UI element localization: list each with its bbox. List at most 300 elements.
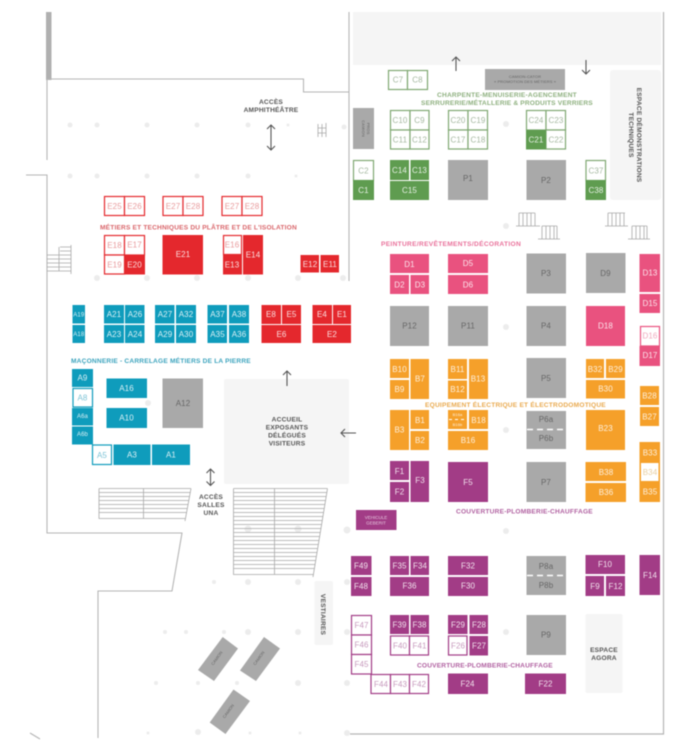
stand B29 bbox=[606, 359, 625, 378]
stand D5 bbox=[448, 254, 488, 273]
stand P11: P11 bbox=[461, 322, 475, 330]
label: accès amphithéâtre: AMPHITHÉÂTRE bbox=[244, 105, 299, 114]
stand F42: F42 bbox=[412, 680, 426, 689]
panel: accueil: DÉLÉGUÉS bbox=[268, 430, 306, 440]
panel: rotated stand 1 bbox=[198, 637, 238, 681]
stand A18: A18 bbox=[73, 332, 85, 338]
heading: couverture 2: COUVERTURE-PLOMBERIE-CHAUFFAGE bbox=[417, 662, 553, 670]
stand B38 bbox=[586, 462, 626, 481]
stand P9 bbox=[526, 615, 566, 655]
stand E20: E20 bbox=[127, 260, 142, 270]
stand D17: D17 bbox=[643, 351, 658, 360]
zone: couverture stands lower bbox=[352, 614, 622, 694]
stand D3 bbox=[410, 275, 429, 294]
stand A6b: A6b bbox=[77, 432, 89, 438]
stand P1: P1 bbox=[463, 174, 473, 183]
arrow: accueil left bbox=[341, 429, 356, 437]
stand A6a: A6a bbox=[77, 414, 89, 420]
stand F36: F36 bbox=[402, 582, 417, 590]
stand F32: F32 bbox=[461, 562, 475, 570]
stands B33 B34 B35: B34 bbox=[643, 468, 658, 477]
stand B11 bbox=[448, 359, 467, 379]
panel: accueil: VISITEURS bbox=[269, 440, 306, 448]
heading: peinture: PEINTURE/REVÊTEMENTS/DÉCORATION bbox=[381, 239, 521, 248]
stand E8 bbox=[262, 305, 281, 324]
stand F42 bbox=[410, 674, 428, 694]
zone: couverture stands middle bbox=[351, 555, 660, 596]
stand D16 bbox=[640, 326, 660, 346]
zone: équipement électrique stands lower bbox=[390, 410, 660, 502]
stand C1 bbox=[353, 180, 374, 200]
stand A35: A35 bbox=[210, 330, 225, 339]
stand F24: F24 bbox=[460, 680, 475, 688]
stand F10 bbox=[586, 555, 625, 574]
stand D13: D13 bbox=[643, 268, 658, 278]
stand B1: B1 bbox=[415, 416, 425, 425]
stand B30: B30 bbox=[598, 384, 613, 394]
stand B16a B16b bbox=[448, 410, 467, 429]
stand C2 bbox=[354, 160, 374, 180]
stand P2 bbox=[526, 160, 566, 200]
panel: véhicule bbox=[356, 510, 396, 530]
panel: camion small: PROS bbox=[366, 123, 371, 135]
stand F32 bbox=[448, 556, 488, 575]
stand B23 bbox=[586, 410, 625, 450]
stand E27 second: E27 bbox=[225, 202, 240, 211]
arrow: down top bbox=[582, 60, 590, 74]
stand E19 bbox=[104, 255, 124, 274]
stand F12: F12 bbox=[608, 582, 623, 591]
stand A9: A9 bbox=[78, 374, 88, 382]
stand A18 bbox=[72, 325, 85, 343]
zone: peinture and grey stands bbox=[390, 253, 660, 366]
stand A32: A32 bbox=[179, 310, 194, 319]
panel: rotated stand 3: CAMION bbox=[222, 703, 235, 719]
stand A19 bbox=[72, 305, 85, 324]
panel: véhicule: GEBERIT bbox=[366, 520, 386, 526]
stand P2: P2 bbox=[541, 176, 551, 185]
stand F3: F3 bbox=[415, 476, 425, 485]
column dots bbox=[68, 121, 509, 736]
stand F28: F28 bbox=[472, 620, 486, 630]
label: accès salles una bbox=[197, 492, 225, 517]
stand F46 bbox=[352, 635, 372, 654]
stands P6a P6b bbox=[526, 411, 566, 449]
stand C15 bbox=[390, 181, 429, 200]
stand F29 bbox=[448, 615, 468, 634]
stairs right bbox=[516, 213, 650, 239]
stand D13 bbox=[640, 254, 660, 292]
stands C22 to C24 bbox=[526, 110, 566, 149]
stand P3: P3 bbox=[541, 269, 551, 278]
stand F26 bbox=[448, 636, 467, 655]
stairs left bbox=[47, 245, 71, 274]
stand F38: F38 bbox=[412, 620, 427, 630]
stand D9 bbox=[586, 253, 626, 293]
stand C21 bbox=[526, 130, 546, 150]
stand A19: A19 bbox=[73, 312, 85, 318]
stand D1: D1 bbox=[404, 260, 415, 269]
stand E28 second bbox=[242, 196, 262, 216]
panel: espace agora bbox=[586, 614, 622, 693]
stand B36: B36 bbox=[599, 488, 614, 497]
stand E4: E4 bbox=[317, 310, 327, 319]
panel: véhicule: VEHICULE bbox=[365, 515, 387, 520]
stand A36 bbox=[229, 325, 249, 343]
stand A35 bbox=[208, 325, 227, 343]
stand F14: F14 bbox=[643, 571, 657, 580]
stand D18 bbox=[586, 306, 625, 346]
stand B30 bbox=[586, 380, 625, 398]
stand P7: P7 bbox=[541, 478, 551, 487]
stand F36 bbox=[390, 577, 429, 596]
stand B28 bbox=[640, 386, 659, 405]
stand A26 bbox=[125, 305, 144, 324]
stand E1 bbox=[333, 305, 351, 324]
stand F22 bbox=[525, 674, 566, 694]
stand D6 bbox=[448, 275, 488, 294]
stand E12 bbox=[300, 255, 319, 272]
stand F29: F29 bbox=[451, 620, 465, 630]
stands C9 to C12: C9 bbox=[414, 116, 425, 125]
stand B10: B10 bbox=[392, 365, 407, 374]
panel: camion bbox=[485, 69, 565, 90]
stand F44 bbox=[371, 674, 390, 694]
arrow: accès salles bbox=[206, 469, 214, 486]
panel: rotated stand 1: CAMION bbox=[210, 650, 224, 666]
stand F9 bbox=[586, 576, 604, 596]
stand F22: F22 bbox=[538, 680, 553, 688]
stand E5: E5 bbox=[286, 310, 297, 319]
stand B16 bbox=[448, 431, 488, 450]
stand A36: A36 bbox=[232, 330, 247, 339]
zone: maçonnerie stands lower bbox=[72, 369, 203, 465]
stand A32 bbox=[176, 305, 196, 324]
stands C22 to C24: C22 bbox=[549, 136, 564, 144]
stand A8: A8 bbox=[78, 394, 88, 402]
stands C17 to C20: C17 bbox=[451, 136, 466, 144]
panel: rotated stand 2: CAMION bbox=[252, 650, 266, 666]
stand E19: E19 bbox=[107, 260, 122, 270]
stands C7 C8: C8 bbox=[412, 76, 423, 84]
stand A23 bbox=[104, 325, 124, 343]
stand E27 bbox=[163, 196, 183, 216]
stand B7: B7 bbox=[415, 374, 425, 384]
stand A10: A10 bbox=[119, 414, 134, 422]
stand F48 bbox=[351, 577, 372, 596]
stand F48: F48 bbox=[354, 582, 368, 591]
stand A30: A30 bbox=[179, 330, 194, 339]
stand E16: E16 bbox=[225, 240, 240, 250]
stand E13 bbox=[223, 255, 242, 274]
stand A37 bbox=[208, 305, 227, 324]
stand A21 bbox=[104, 305, 124, 324]
stand E2: E2 bbox=[327, 330, 337, 339]
stand F41 bbox=[410, 636, 428, 655]
label: accès amphithéâtre bbox=[244, 97, 299, 114]
label: accès amphithéâtre: ACCÈS bbox=[259, 97, 283, 106]
stand E18 bbox=[104, 236, 124, 255]
stand D18: D18 bbox=[598, 322, 613, 330]
stand B2 bbox=[410, 431, 429, 450]
stand P4: P4 bbox=[541, 322, 551, 330]
stand B28: B28 bbox=[642, 392, 657, 400]
stand F27: F27 bbox=[472, 642, 486, 650]
stand A16: A16 bbox=[119, 384, 134, 393]
stand A21: A21 bbox=[107, 310, 122, 319]
stand F47: F47 bbox=[354, 621, 369, 630]
heading: couverture 1: COUVERTURE-PLOMBERIE-CHAUFFAGE bbox=[456, 508, 593, 516]
panel: vestiaires bbox=[314, 581, 333, 645]
panel: camion: « PROMOTION DES MÉTIERS » bbox=[494, 79, 557, 84]
arrow: accueil up bbox=[283, 371, 291, 386]
stand A29 bbox=[155, 325, 174, 343]
stand E17: E17 bbox=[127, 240, 142, 250]
stand F35: F35 bbox=[392, 562, 407, 570]
stand D15 bbox=[640, 294, 660, 313]
stand D17 bbox=[640, 346, 660, 366]
zone: couverture stands upper bbox=[390, 461, 626, 502]
stand C2: C2 bbox=[358, 166, 369, 176]
stand F41: F41 bbox=[412, 642, 427, 650]
stand E13: E13 bbox=[225, 260, 240, 270]
panel: camion: CAMION-CATOR bbox=[509, 74, 541, 79]
stand A23: A23 bbox=[107, 330, 122, 339]
stand E25: E25 bbox=[107, 202, 122, 211]
stand C13: C13 bbox=[412, 166, 427, 175]
stand P3 bbox=[526, 254, 566, 294]
stand A26: A26 bbox=[128, 310, 143, 319]
stand B18: B18 bbox=[471, 416, 486, 425]
stands C7 C8: C7 bbox=[393, 76, 404, 84]
stands C9 to C12: C10 bbox=[393, 116, 408, 125]
stands P8a P8b: P8b bbox=[539, 581, 554, 590]
stand C37: C37 bbox=[589, 166, 604, 176]
panel: top grey area bbox=[353, 12, 661, 65]
stand F39 bbox=[390, 615, 409, 634]
stands B33 B34 B35: B35 bbox=[643, 488, 658, 496]
stand A5: A5 bbox=[97, 451, 107, 460]
panel: accueil: EXPOSANTS bbox=[266, 424, 309, 432]
stand E25 bbox=[104, 196, 124, 216]
stand A30 bbox=[176, 325, 196, 343]
stand P5: P5 bbox=[541, 374, 551, 383]
arrow: up top bbox=[452, 57, 460, 71]
stand E28: E28 bbox=[186, 202, 201, 211]
stand D16: D16 bbox=[643, 332, 658, 340]
stand D9: D9 bbox=[600, 269, 611, 278]
zone: charpente stands bbox=[353, 69, 606, 200]
stand F24 bbox=[448, 674, 488, 694]
stand E1: E1 bbox=[337, 310, 347, 319]
stand F45 bbox=[352, 654, 372, 674]
panel: espace agora: AGORA bbox=[591, 655, 617, 662]
stairs: grand left bbox=[99, 488, 191, 521]
stand E2 bbox=[312, 325, 351, 343]
stand F45: F45 bbox=[354, 660, 369, 669]
stand F44: F44 bbox=[374, 680, 388, 689]
stands C7 C8 bbox=[388, 70, 428, 90]
stand B12: B12 bbox=[450, 385, 465, 394]
stands P8a P8b bbox=[526, 556, 566, 595]
stand A29: A29 bbox=[158, 330, 173, 339]
stand D2: D2 bbox=[394, 280, 405, 290]
stand F12 bbox=[606, 576, 625, 596]
panel: espace agora: ESPACE bbox=[590, 647, 618, 654]
stands P6a P6b: P6a bbox=[539, 415, 554, 424]
stand E26: E26 bbox=[127, 202, 142, 211]
stand P9: P9 bbox=[541, 630, 551, 640]
stand B13 bbox=[469, 359, 488, 399]
stand C13 bbox=[410, 160, 429, 180]
stand F3 bbox=[410, 461, 429, 502]
stand F40: F40 bbox=[393, 642, 407, 650]
stand C38: C38 bbox=[589, 186, 604, 195]
stands C22 to C24: C24 bbox=[529, 116, 544, 125]
stand B3: B3 bbox=[394, 426, 405, 434]
stand F39: F39 bbox=[392, 620, 407, 630]
stand F2: F2 bbox=[395, 488, 405, 496]
stand C38 bbox=[586, 180, 606, 200]
stands C17 to C20: C19 bbox=[471, 116, 486, 125]
stand D5: D5 bbox=[463, 259, 474, 268]
stand F34 bbox=[410, 556, 429, 575]
stand F35 bbox=[390, 556, 409, 575]
stand P12 bbox=[390, 306, 429, 346]
stand E16 bbox=[224, 236, 242, 254]
stand F40 bbox=[390, 636, 410, 655]
heading: charpente: CHARPENTE-MENUISERIE-AGENCEMENT bbox=[437, 92, 577, 99]
heading: plâtre: MÉTIERS ET TECHNIQUES DU PLÂTRE ET DE L'ISOLATION bbox=[100, 222, 297, 232]
stand P4 bbox=[526, 306, 566, 346]
stand D2 bbox=[390, 275, 409, 294]
heading: charpente: SERRURERIE/MÉTALLERIE & PRODUITS VERRIERS bbox=[421, 98, 593, 107]
stand F30: F30 bbox=[461, 582, 475, 590]
stands C17 to C20 bbox=[448, 110, 488, 149]
stand A38: A38 bbox=[232, 310, 247, 319]
stand F49: F49 bbox=[354, 562, 368, 570]
stand F9: F9 bbox=[590, 582, 600, 591]
stand C1: C1 bbox=[358, 186, 369, 195]
zone: équipement électrique stands upper bbox=[390, 358, 659, 426]
stand E8: E8 bbox=[266, 310, 276, 319]
stand F34: F34 bbox=[413, 562, 427, 570]
stand E26 bbox=[124, 196, 144, 216]
stand B13: B13 bbox=[471, 374, 486, 384]
stand B23: B23 bbox=[598, 424, 613, 433]
stand F5: F5 bbox=[463, 478, 473, 487]
stand C37 bbox=[586, 160, 606, 180]
stand B16a B16b: B16a bbox=[453, 412, 463, 417]
stand C14 bbox=[390, 160, 409, 180]
stand B32: B32 bbox=[588, 365, 603, 374]
stand F43: F43 bbox=[393, 680, 407, 689]
stairs: grand right bbox=[234, 488, 328, 577]
stands P6a P6b: P6b bbox=[539, 434, 554, 443]
stand E4 bbox=[312, 305, 332, 324]
stands C9 to C12: C12 bbox=[412, 136, 427, 144]
stand B36 bbox=[586, 483, 626, 502]
stand E14 bbox=[243, 235, 263, 274]
stand A1: A1 bbox=[166, 450, 176, 460]
stand B9 bbox=[390, 380, 409, 399]
stands C17 to C20: C20 bbox=[451, 116, 466, 125]
stands P8a P8b: P8a bbox=[539, 562, 554, 571]
stands C17 to C20: C18 bbox=[471, 136, 486, 144]
stand E21: E21 bbox=[176, 250, 191, 259]
stand E14: E14 bbox=[246, 250, 261, 260]
stand C14: C14 bbox=[392, 166, 407, 175]
stand E28 bbox=[183, 196, 203, 216]
icon: ladder bbox=[318, 123, 326, 137]
stand E11 bbox=[320, 255, 339, 272]
stand D1 bbox=[390, 254, 429, 273]
stand F49 bbox=[351, 556, 372, 575]
stand B3 bbox=[390, 410, 409, 450]
stand C15: C15 bbox=[402, 186, 417, 195]
stand E6: E6 bbox=[276, 330, 287, 339]
stands C9 to C12 bbox=[390, 110, 429, 149]
stand F2 bbox=[390, 482, 409, 502]
panel: rotated stand 2 bbox=[240, 637, 280, 681]
stand F10: F10 bbox=[598, 560, 612, 569]
arrow: amphithéâtre bbox=[267, 125, 275, 150]
panel: espace démonstrations techniques: TECHNIQUES bbox=[627, 112, 634, 158]
stand P1 bbox=[448, 160, 488, 200]
stand B2: B2 bbox=[415, 436, 425, 445]
stand B16a B16b: B16b bbox=[453, 422, 463, 427]
stand B7 bbox=[410, 359, 429, 399]
stand E5 bbox=[282, 305, 301, 324]
zone: plâtre stands lower bbox=[104, 235, 339, 274]
stand E20 bbox=[125, 255, 145, 274]
stand F28 bbox=[470, 615, 488, 634]
stands C9 to C12: C11 bbox=[393, 136, 408, 144]
stand P11 bbox=[448, 306, 488, 346]
stand D15: D15 bbox=[643, 299, 658, 308]
stand F26: F26 bbox=[451, 642, 465, 650]
label: accès salles una: SALLES bbox=[197, 502, 225, 509]
zone: maçonnerie and E stands row bbox=[72, 305, 351, 343]
stand B12 bbox=[448, 380, 467, 399]
panel: accueil: ACCUEIL bbox=[272, 416, 302, 424]
panel: espace démonstrations techniques: ESPACE DÉMONSTRATIONS bbox=[635, 88, 644, 183]
stand F47 bbox=[352, 616, 372, 635]
stand F1 bbox=[390, 461, 409, 480]
heading: charpente bbox=[421, 92, 593, 107]
stand E17 bbox=[124, 236, 144, 255]
stand A24: A24 bbox=[128, 330, 143, 339]
stand F14 bbox=[640, 555, 660, 595]
stand B16: B16 bbox=[461, 436, 476, 445]
panel: vestiaires: VESTIAIRES bbox=[319, 594, 326, 635]
stand E21 bbox=[162, 235, 203, 274]
stand E18: E18 bbox=[107, 241, 122, 250]
panel: camion small: CAMION bbox=[361, 120, 366, 137]
stand A3: A3 bbox=[127, 450, 137, 460]
panel: camion small bbox=[353, 108, 374, 149]
label: accès salles una: ACCÈS bbox=[199, 492, 223, 501]
stand B11: B11 bbox=[451, 365, 465, 374]
heading: équipement électrique: EQUIPEMENT ÉLECTRIQUE ET ÉLECTRODOMOTIQUE bbox=[425, 400, 606, 409]
panel: espace démonstrations techniques bbox=[610, 70, 661, 200]
stand A27 bbox=[155, 305, 174, 324]
panel: accueil bbox=[224, 379, 349, 484]
zone: plâtre stands upper bbox=[104, 196, 262, 216]
stands B33 B34 B35 bbox=[640, 442, 660, 502]
stand B29: B29 bbox=[608, 365, 623, 374]
stand A12: A12 bbox=[176, 399, 191, 408]
